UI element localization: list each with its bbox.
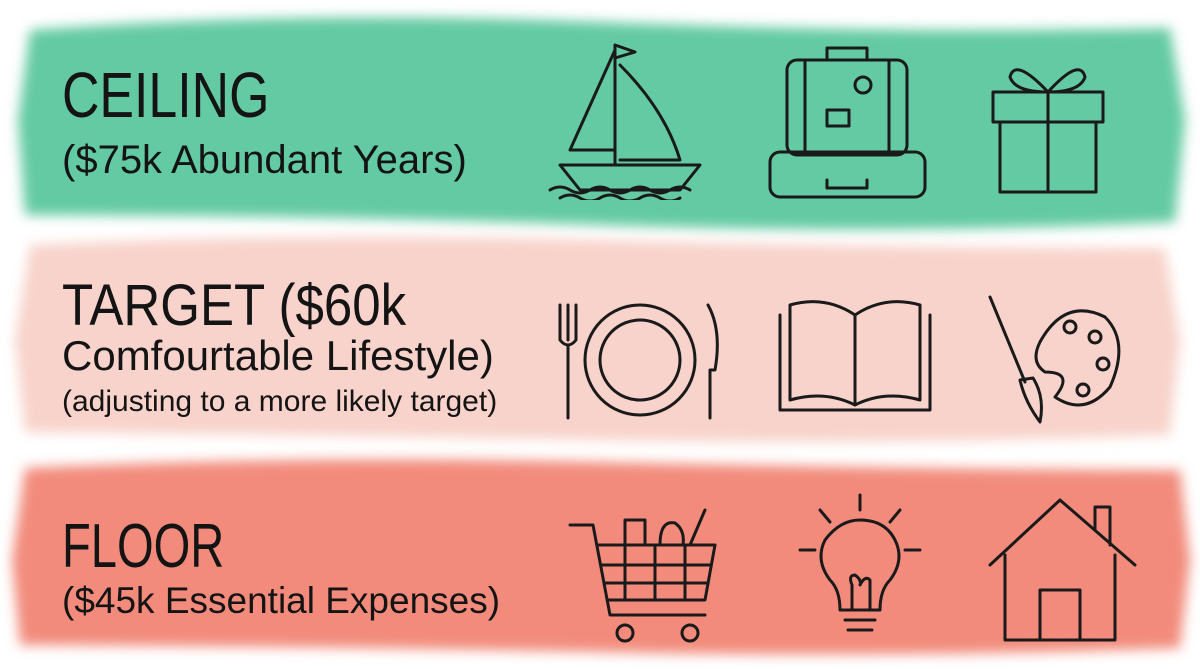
text: target note: (adjusting to a more likely target) [62, 385, 497, 418]
icon: palette and brush [988, 296, 1120, 424]
text: ceiling amount: ($75k Abundant Years) [62, 138, 467, 182]
icon: open book [778, 300, 932, 412]
icon: sailboat [548, 44, 702, 200]
heading: floor: FLOOR [62, 512, 224, 581]
icon: shopping cart [568, 508, 716, 642]
text: target lifestyle: Comfourtable Lifestyle) [62, 332, 494, 379]
heading: ceiling: CEILING [62, 59, 269, 131]
icon: gift [992, 68, 1104, 194]
icon: light bulb [798, 494, 922, 632]
icon: suitcases [768, 46, 926, 198]
heading: target: TARGET ($60k [62, 273, 406, 338]
text: floor amount: ($45k Essential Expenses) [62, 580, 500, 621]
icon: house [988, 498, 1137, 642]
icon: plate and cutlery [558, 303, 719, 420]
